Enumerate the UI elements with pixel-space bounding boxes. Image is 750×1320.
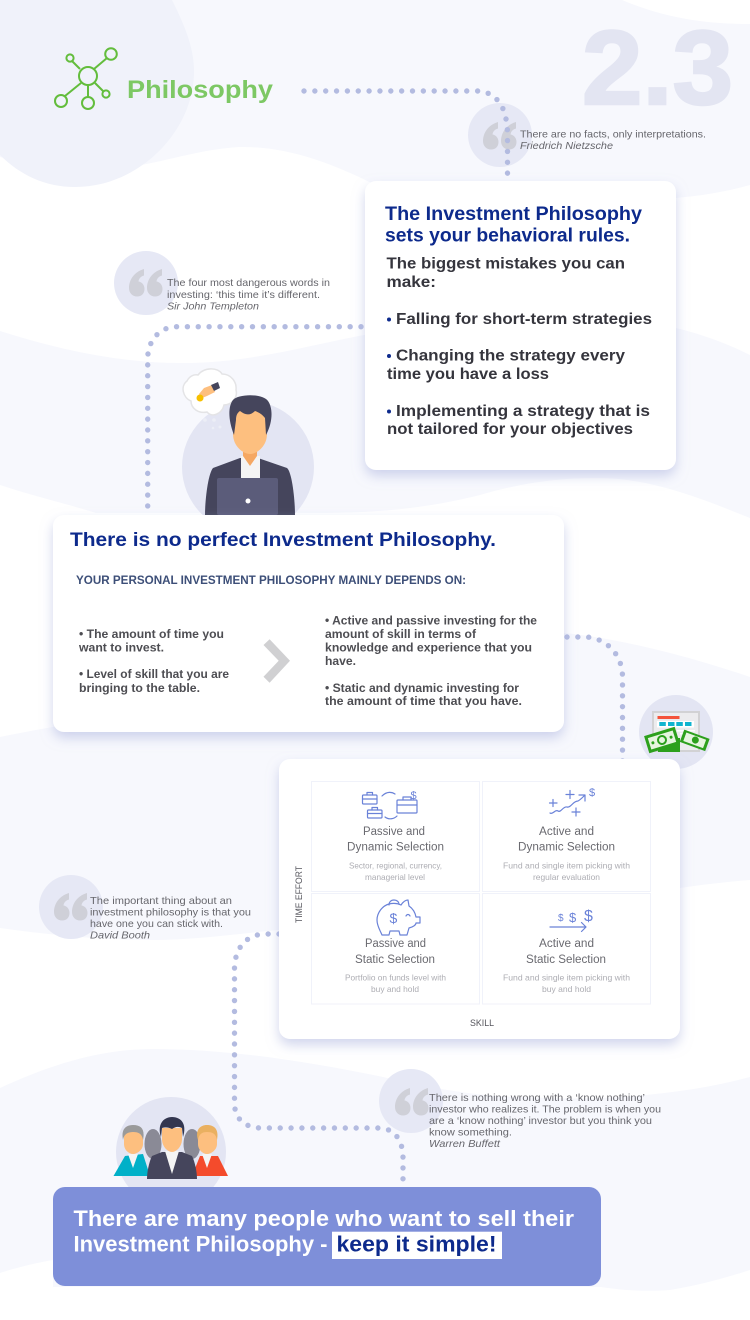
cell: passive dynamic: Dynamic Selection: [347, 842, 444, 854]
left list: bringing to the table.: [79, 683, 200, 695]
quote: Warren Buffett: are a ‘know nothing’ investor but you think you: [429, 1115, 652, 1127]
icon: piggy bank: $: [390, 910, 398, 926]
quote: Nietzsche: Friedrich Nietzsche: [520, 140, 613, 152]
cell: active static: Static Selection: [526, 954, 606, 966]
card lead-in: [386, 256, 625, 291]
icon: briefcases: [362, 790, 417, 819]
dotted connector: title to card: [304, 91, 508, 185]
quote: Warren Buffett: [379, 1069, 661, 1150]
banner: keep it simple: There are many people who want to sell their: [74, 1206, 574, 1231]
card: selection matrix: [279, 759, 680, 1039]
mistakes list: not tailored for your objectives: [387, 421, 633, 438]
highlight: keep it simple!: [336, 1232, 496, 1257]
cell: passive dynamic: Passive and: [363, 826, 425, 838]
banner: keep it simple: [53, 1187, 601, 1286]
heading: There is no perfect Investment Philosophy.: [70, 530, 496, 551]
right list: knowledge and experience that you: [325, 642, 532, 654]
card: behavioral rules: [365, 181, 676, 470]
illustration: person with laptop: [182, 369, 314, 533]
quote: Warren Buffett: know something.: [429, 1126, 512, 1138]
icon: dollars and arrow: $: [558, 913, 564, 924]
cell: active dynamic: regular evaluation: [533, 872, 600, 882]
icon: network: [55, 48, 117, 109]
mistakes list: time you have a loss: [387, 366, 549, 383]
card lead-in: make:: [386, 274, 436, 291]
cell: passive dynamic: [312, 782, 480, 892]
cell: active dynamic: Dynamic Selection: [518, 842, 615, 854]
cell: passive static: [312, 894, 480, 1004]
cell: active static: Fund and single item picking with: [503, 972, 630, 982]
cell: active dynamic: [482, 782, 650, 892]
quote: Warren Buffett: Warren Buffett: [429, 1138, 501, 1150]
quote: David Booth: investment philosophy is that you: [90, 906, 251, 918]
right list: [325, 616, 537, 708]
right list: have.: [325, 656, 356, 668]
right list: amount of skill in terms of: [325, 629, 476, 641]
cell: passive static: buy and hold: [371, 984, 419, 994]
mistakes list: Falling for short-term strategies: [396, 311, 652, 328]
thought cloud: [183, 369, 236, 429]
quote: David Booth: The important thing about an: [90, 895, 232, 907]
left list: [78, 629, 229, 695]
quote: Templeton: The four most dangerous words in: [167, 277, 330, 289]
right list: • Active and passive investing for the: [325, 616, 537, 628]
cell: active dynamic: Fund and single item picking with: [503, 860, 630, 870]
icon: growth line: $: [589, 787, 595, 799]
banner: keep it simple: Investment Philosophy -: [74, 1232, 328, 1257]
icon: dollars and arrow: $: [584, 908, 593, 925]
quote: David Booth: David Booth: [90, 930, 150, 942]
icon: piggy bank: [377, 900, 420, 935]
left list: • Level of skill that you are: [79, 669, 229, 681]
quote: Nietzsche: There are no facts, only interpretations.: [520, 128, 706, 140]
axis label: skill: SKILL: [470, 1018, 494, 1028]
illustration: team: [114, 1097, 228, 1207]
card heading: [385, 204, 642, 246]
icon: briefcases: $: [410, 790, 417, 802]
mistakes list: Implementing a strategy that is: [396, 403, 650, 420]
icon: money and screen: [639, 695, 713, 769]
dotted connector: matrix to banner: [234, 934, 403, 1184]
icon: growth line: [550, 787, 595, 816]
subheading: YOUR PERSONAL INVESTMENT PHILOSOPHY MAINLY DEPENDS ON:: [76, 575, 466, 587]
cell: passive static: Passive and: [365, 938, 426, 950]
cell: active static: buy and hold: [542, 984, 591, 994]
quote: Warren Buffett: There is nothing wrong with a ‘know nothing’: [429, 1092, 645, 1104]
card heading: sets your behavioral rules.: [385, 226, 630, 246]
cell: active static: [482, 894, 650, 1004]
cell: passive dynamic: managerial level: [365, 872, 425, 882]
right list: the amount of time that you have.: [325, 696, 522, 708]
card lead-in: The biggest mistakes you can: [386, 256, 625, 273]
axis label: time effort: TIME EFFORT: [294, 866, 304, 923]
quote: David Booth: have one you can stick with.: [90, 918, 223, 930]
quote: Templeton: [114, 251, 330, 315]
mistakes list: Changing the strategy every: [396, 348, 625, 365]
quote: Warren Buffett: investor who realizes it. The problem is when you: [429, 1104, 661, 1116]
left list: want to invest.: [78, 642, 164, 654]
quote: Nietzsche: [468, 103, 706, 167]
dotted connector: card to person: [148, 327, 361, 508]
quote: Templeton: Sir John Templeton: [167, 300, 259, 312]
cell: passive dynamic: Sector, regional, currency,: [349, 860, 442, 870]
cell: passive static: Static Selection: [355, 954, 435, 966]
cell: active static: Active and: [539, 938, 594, 950]
quote: Templeton: investing: ‘this time it’s different.: [167, 289, 320, 301]
left list: • The amount of time you: [79, 629, 224, 641]
card heading: The Investment Philosophy: [385, 204, 642, 225]
cell: passive static: Portfolio on funds level with: [345, 972, 446, 982]
section number: 2.3: [582, 10, 733, 127]
dotted connector: panel to money icon: [567, 637, 622, 762]
arrow: chevron: [264, 639, 290, 683]
card: no perfect philosophy: [53, 515, 564, 732]
right list: • Static and dynamic investing for: [325, 683, 520, 695]
cell: active dynamic: Active and: [539, 826, 594, 838]
mistakes list: [387, 311, 652, 438]
icon: dollars and arrow: [550, 908, 593, 932]
icon: dollars and arrow: $: [569, 910, 577, 925]
quote: David Booth: [39, 875, 251, 942]
title: Philosophy: [127, 76, 273, 104]
